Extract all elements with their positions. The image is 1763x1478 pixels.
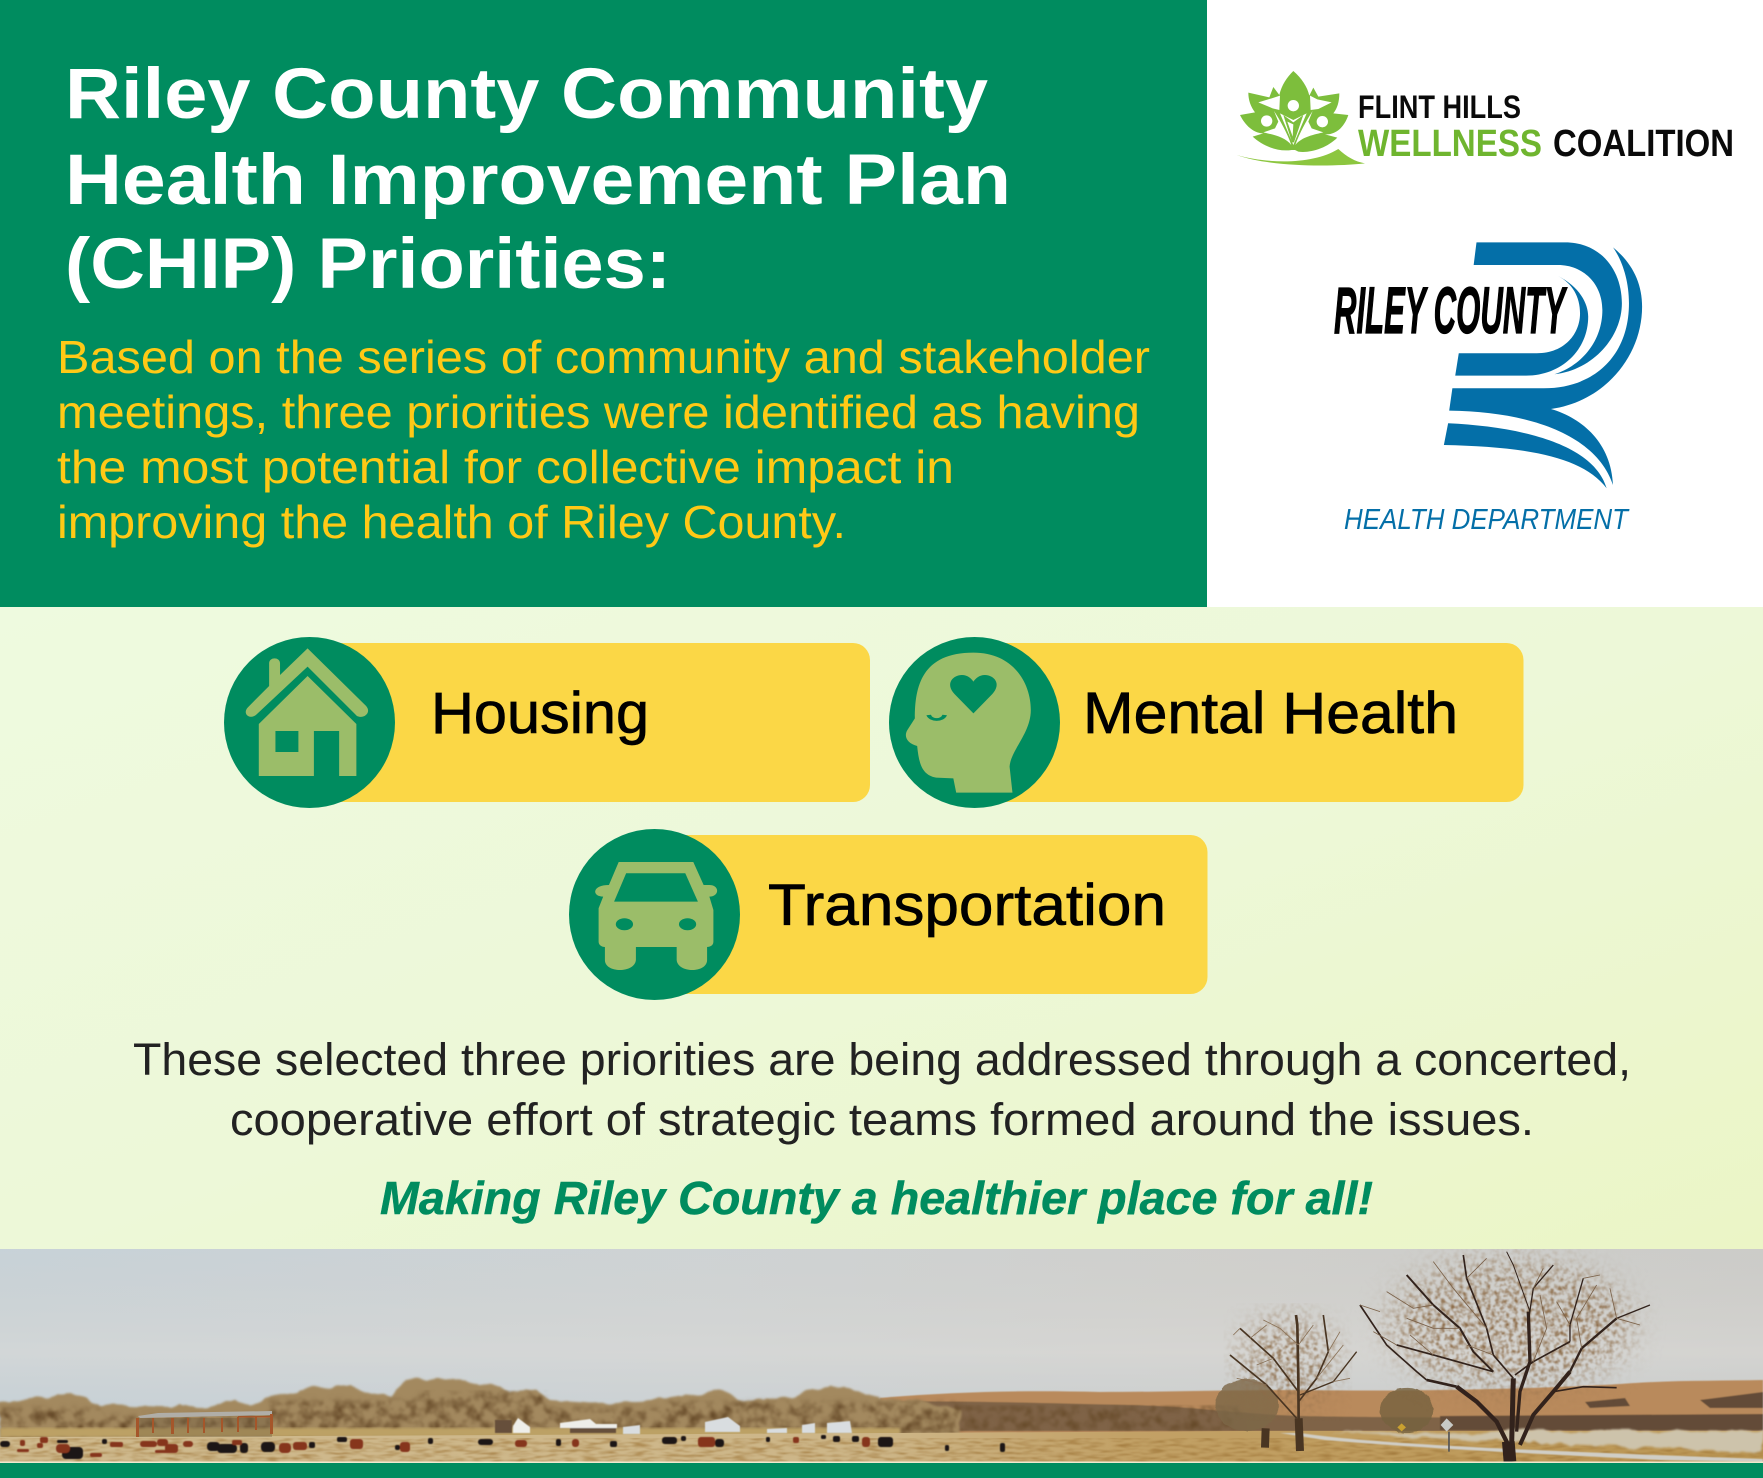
houses (495, 1417, 852, 1434)
label: Mental Health: Mental Health (1083, 681, 1458, 746)
tree line, left (0, 1378, 960, 1440)
title: Health Improvement Plan (65, 141, 1011, 220)
logo: Riley County Health Department (1334, 242, 1642, 536)
title (65, 55, 1011, 304)
logo wordmark: COALITION (1553, 123, 1734, 165)
logo wordmark (1358, 89, 1734, 165)
logo wordmark: FLINT HILLS (1358, 89, 1521, 125)
hill tree mottling (959, 1404, 1236, 1432)
background panel (0, 607, 1763, 1249)
logo wordmark: WELLNESS (1358, 123, 1542, 165)
distant hills, right (880, 1380, 1763, 1435)
tagline: Making Riley County a healthier place for all! (380, 1172, 1373, 1224)
photo: prairie landscape (0, 1249, 1763, 1463)
barn (136, 1411, 273, 1437)
title: Riley County Community (65, 55, 989, 134)
tree line mottling (0, 1392, 960, 1438)
summary text: cooperative effort of strategic teams formed around the issues. (230, 1094, 1534, 1145)
grass band (0, 1428, 900, 1437)
intro text: the most potential for collective impact in (57, 441, 954, 493)
logo: Flint Hills Wellness Coalition (1237, 71, 1734, 165)
intro text: Based on the series of community and stakeholder (57, 331, 1150, 383)
label: Housing: Housing (431, 681, 649, 746)
priority: Housing (224, 637, 870, 808)
photo bottom highlight (0, 1462, 1763, 1463)
bottom strip (0, 1463, 1763, 1478)
icon: car (595, 862, 717, 970)
label: Transportation: Transportation (768, 873, 1166, 938)
summary text: These selected three priorities are being addressed through a concerted, (133, 1034, 1631, 1085)
tree twigs haze (1242, 1263, 1630, 1404)
cattle (0, 1435, 1005, 1459)
big tree (1360, 1252, 1650, 1462)
icon: head with heart (906, 653, 1031, 793)
summary text (133, 1034, 1631, 1145)
field (0, 1431, 1763, 1463)
icon: house (246, 648, 368, 776)
intro text (57, 331, 1150, 548)
road (1280, 1433, 1763, 1462)
small tree (1230, 1315, 1357, 1451)
logo text: Health Department: HEALTH DEPARTMENT (1344, 504, 1630, 536)
priority: Transportation (569, 829, 1208, 1000)
logos panel (1207, 0, 1763, 607)
priority: Mental Health (889, 637, 1524, 808)
small trees and bushes (1215, 1379, 1453, 1452)
intro text: meetings, three priorities were identified as having (57, 386, 1140, 438)
header panel (0, 0, 1207, 607)
icon: blue R swoosh (1444, 242, 1642, 488)
icon: green lotus leaf (1237, 71, 1365, 165)
title: (CHIP) Priorities: (65, 225, 671, 304)
intro text: improving the health of Riley County. (57, 496, 846, 548)
